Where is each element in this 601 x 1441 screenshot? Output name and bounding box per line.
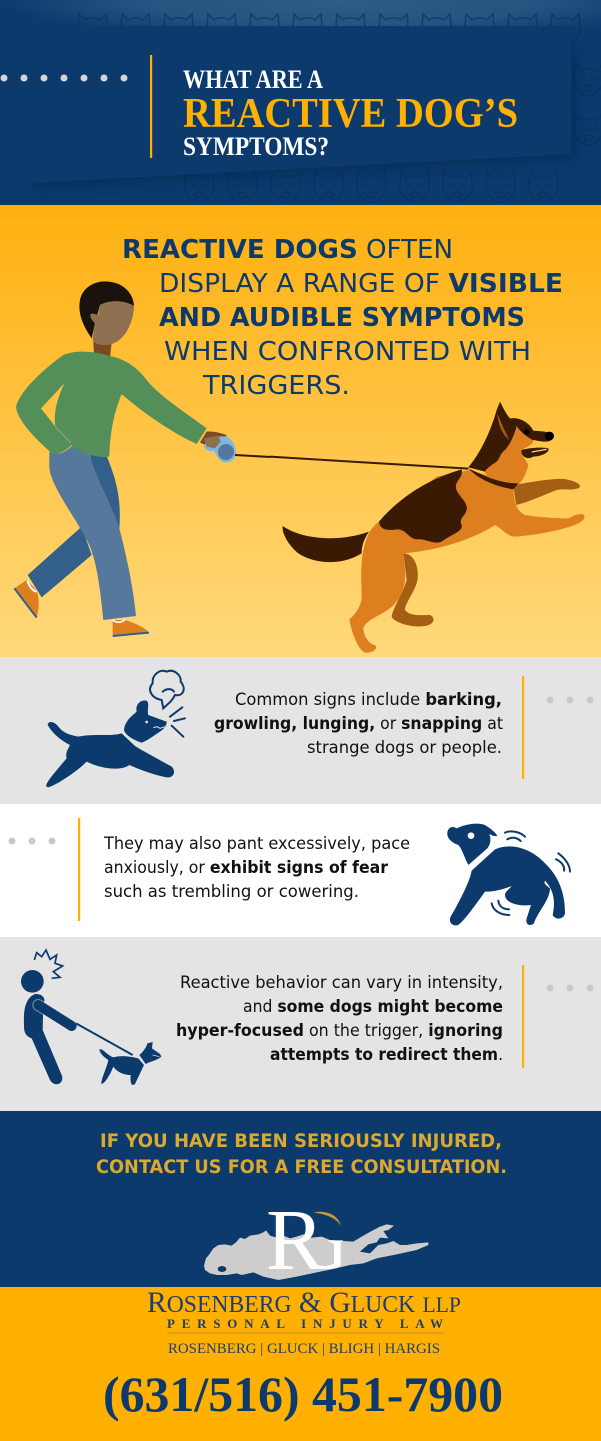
illustration: man holding leash xyxy=(14,281,271,636)
firm name: ROSENBERG & GLUCK LLP xyxy=(147,1286,461,1319)
dots xyxy=(546,696,594,704)
firm name: ROSENBERG | GLUCK | BLIGH | HARGIS xyxy=(168,1341,440,1357)
phone number: (631/516) 451-7900 xyxy=(103,1366,503,1422)
title text: REACTIVE DOG’S xyxy=(183,91,518,137)
text block: attempts to redirect them. xyxy=(270,1045,503,1065)
cta text: CONTACT US FOR A FREE CONSULTATION. xyxy=(96,1156,507,1178)
text block: strange dogs or people. xyxy=(307,738,502,758)
text block xyxy=(176,973,503,1065)
text block: Reactive behavior can vary in intensity, xyxy=(180,973,503,993)
firm name: PERSONAL INJURY LAW xyxy=(167,1316,443,1331)
text block: anxiously, or exhibit signs of fear xyxy=(104,858,389,878)
dots xyxy=(8,838,56,844)
panel: common signs xyxy=(0,657,601,804)
hero heading: DISPLAY A RANGE OF VISIBLE xyxy=(159,269,563,299)
text block: They may also pant excessively, pace xyxy=(103,834,410,854)
text block: Common signs include barking, xyxy=(235,690,502,710)
title panel xyxy=(0,26,577,190)
dots xyxy=(546,984,594,992)
panel: call to action xyxy=(0,1111,601,1288)
hero heading xyxy=(122,235,563,401)
yellow hero panel xyxy=(0,205,601,657)
hero heading: TRIGGERS. xyxy=(202,371,350,401)
dots row xyxy=(0,74,128,82)
text block: such as trembling or cowering. xyxy=(104,882,359,902)
panel: panting and pacing xyxy=(0,804,601,937)
logo: long island with monogram xyxy=(204,1191,428,1288)
firm name xyxy=(147,1286,461,1357)
icon: person with dog on leash xyxy=(21,950,161,1085)
text block: and some dogs might become xyxy=(243,997,503,1017)
cta text xyxy=(96,1130,507,1178)
icon: barking dog xyxy=(46,671,185,787)
title text xyxy=(183,65,518,161)
hero heading: AND AUDIBLE SYMPTOMS xyxy=(159,303,525,333)
panel: reactive intensity xyxy=(0,937,601,1111)
illustration: german shepherd on leash xyxy=(270,402,585,653)
title text: WHAT ARE A xyxy=(183,65,323,94)
panel: firm contact xyxy=(0,1286,601,1441)
text block: hyper-focused on the trigger, ignoring xyxy=(176,1021,503,1041)
hero heading: WHEN CONFRONTED WITH xyxy=(164,337,531,367)
hero heading: REACTIVE DOGS OFTEN xyxy=(122,235,453,265)
text block xyxy=(214,690,503,758)
icon: trembling dog xyxy=(447,824,570,925)
logo: long island with monogram: R xyxy=(266,1191,325,1288)
text block: growling, lunging, or snapping at xyxy=(214,714,503,734)
title text: SYMPTOMS? xyxy=(183,132,329,161)
cta text: IF YOU HAVE BEEN SERIOUSLY INJURED, xyxy=(100,1130,502,1152)
text block xyxy=(103,834,410,902)
header band xyxy=(0,0,601,205)
